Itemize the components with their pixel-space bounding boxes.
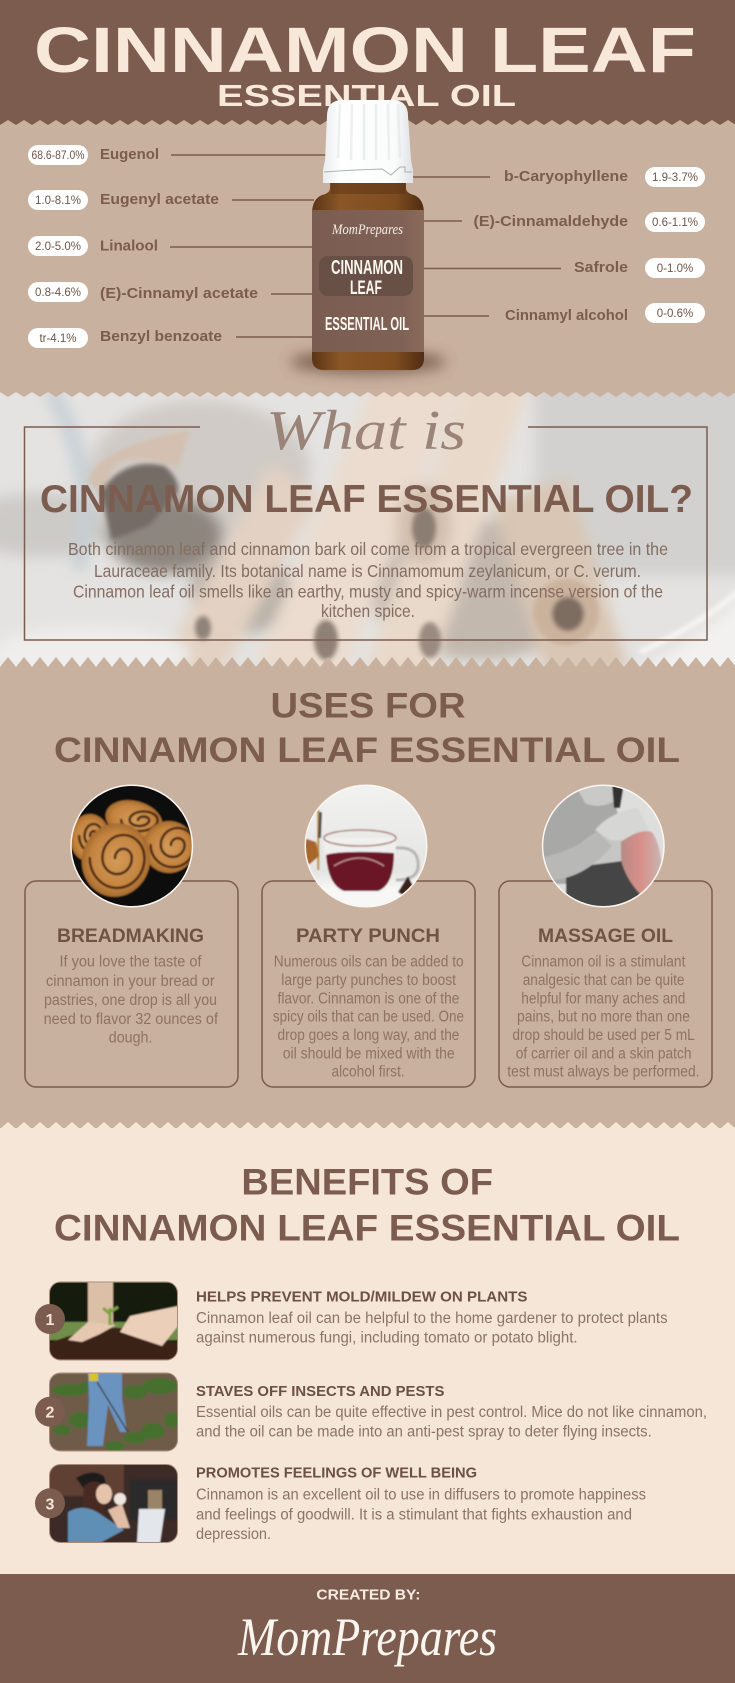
chemical composition: left labels: 2.0-5.0%: [35, 241, 81, 253]
chemical composition: left labels: Benzyl benzoate: [100, 329, 222, 345]
benefit 1: [35, 1282, 668, 1360]
benefit text: and the oil can be made into an anti-pest spray to deter flying insects.: [196, 1424, 652, 1441]
bottle: ESSENTIAL OIL: [325, 314, 409, 334]
chemical composition: right labels: (E)-Cinnamaldehyde: [474, 214, 628, 230]
card text: [44, 954, 219, 1047]
chemical composition: left labels: 0.8-4.6%: [35, 287, 81, 299]
photo: punch glass: [304, 784, 428, 908]
chemical composition: left labels: 1.0-8.1%: [35, 195, 81, 207]
panel: header background: [0, 0, 735, 126]
card text: [507, 954, 700, 1081]
benefit text: [196, 1310, 668, 1347]
heading: uses: USES FOR: [270, 686, 466, 726]
card text: drop should be used per 5 mL: [512, 1027, 695, 1044]
chemical composition: left labels: Eugenol: [100, 147, 159, 163]
chemical composition: right labels: 0-0.6%: [657, 308, 693, 320]
chemical composition: right labels: b-Caryophyllene: [504, 169, 628, 185]
photo: cinnamon rolls: [68, 783, 196, 909]
card text: of carrier oil and a skin patch: [516, 1045, 692, 1062]
title: [34, 14, 696, 113]
card text: spicy oils that can be used. One: [273, 1009, 464, 1026]
card text: analgesic that can be quite: [523, 972, 684, 989]
chemical composition: left labels: Eugenyl acetate: [100, 192, 219, 208]
title: CINNAMON LEAF: [34, 14, 696, 86]
number badge: [35, 1304, 65, 1334]
card text: pains, but no more than one: [517, 1009, 690, 1026]
card text: test must always be performed.: [507, 1064, 700, 1081]
number badge: [35, 1488, 65, 1518]
decorative zigzag to cream: [0, 1122, 735, 1129]
card text: dough.: [109, 1030, 152, 1047]
card title: BREADMAKING: [57, 926, 204, 947]
title: ESSENTIAL OIL: [217, 78, 516, 113]
card text: [273, 954, 464, 1081]
bottle: [290, 100, 446, 374]
chemical composition: left labels: tr-4.1%: [39, 333, 77, 345]
decorative zigzag edges of photo: [0, 392, 735, 667]
card text: oil should be mixed with the: [283, 1045, 455, 1062]
benefit text: [196, 1486, 646, 1543]
card title: PARTY PUNCH: [296, 926, 440, 947]
chemical composition: left labels: [28, 145, 326, 348]
panel: what is frame: [24, 427, 707, 640]
chemical composition: right labels: [410, 167, 705, 324]
heading: what is: What is: [266, 400, 466, 462]
heading: benefits: BENEFITS OF: [241, 1160, 493, 1202]
heading: uses: [54, 686, 680, 770]
benefit text: against numerous fungi, including tomato or potato blight.: [196, 1330, 578, 1347]
panel: benefits background: [0, 1129, 735, 1575]
benefit 3: [35, 1464, 646, 1543]
text block: definition: kitchen spice.: [321, 601, 415, 621]
heading: uses: CINNAMON LEAF ESSENTIAL OIL: [54, 730, 680, 770]
card text: large party punches to boost: [281, 972, 457, 989]
text block: definition: Both cinnamon leaf and cinnamon bark oil come from a tropical evergreen tree in the: [68, 539, 668, 559]
card text: flavor. Cinnamon is one of the: [278, 990, 459, 1007]
number badge: [35, 1397, 65, 1427]
bottle: CINNAMON: [331, 257, 403, 279]
number badge: 3: [46, 1496, 55, 1513]
card text: pastries, one drop is all you: [44, 992, 217, 1009]
card text: helpful for many aches and: [521, 990, 685, 1007]
panel: composition background: [0, 120, 735, 395]
chemical composition: left labels: 68.6-87.0%: [32, 150, 84, 162]
card: massage oil: [499, 784, 712, 1087]
benefit text: Cinnamon leaf oil can be helpful to the home gardener to protect plants: [196, 1310, 668, 1327]
chemical composition: right labels: 0-1.0%: [657, 263, 693, 275]
benefit text: Cinnamon is an excellent oil to use in diffusers to promote happiness: [196, 1486, 646, 1504]
chemical composition: right labels: 1.9-3.7%: [652, 172, 698, 184]
benefit 2: [35, 1373, 707, 1451]
card text: Cinnamon oil is a stimulant: [521, 954, 686, 971]
heading: benefits: CINNAMON LEAF ESSENTIAL OIL: [54, 1206, 680, 1248]
card: party punch: [262, 784, 475, 1087]
benefit heading: HELPS PREVENT MOLD/MILDEW ON PLANTS: [196, 1290, 528, 1306]
card text: drop goes a long way, and the: [278, 1027, 459, 1044]
number badge: 1: [46, 1312, 55, 1329]
number badge: 2: [46, 1405, 55, 1422]
chemical composition: left labels: Linalool: [100, 238, 158, 254]
bottle: LEAF: [350, 278, 382, 299]
benefit heading: STAVES OFF INSECTS AND PESTS: [196, 1384, 445, 1400]
bottle: MomPrepares: [331, 222, 403, 238]
footer label: CREATED BY:: [316, 1587, 420, 1604]
photo: blurred cinnamon sticks background: [0, 392, 735, 667]
photo: woman with coffee and laptop: [49, 1464, 178, 1543]
panel: uses background: [0, 667, 735, 1128]
chemical composition: right labels: Safrole: [574, 260, 628, 276]
card text: cinnamon in your bread or: [46, 973, 215, 990]
card text: If you love the taste of: [60, 954, 202, 971]
chemical composition: right labels: 0.6-1.1%: [652, 217, 698, 229]
chemical composition: left labels: (E)-Cinnamyl acetate: [100, 286, 258, 302]
card text: need to flavor 32 ounces of: [44, 1011, 219, 1028]
card title: MASSAGE OIL: [538, 926, 673, 947]
card text: Numerous oils can be added to: [274, 954, 464, 971]
text block: definition: [68, 539, 668, 621]
footer: [0, 1574, 735, 1683]
text block: definition: Cinnamon leaf oil smells like an earthy, musty and spicy-warm incense version of the: [73, 582, 663, 602]
logo: MomPrepares: MomPrepares: [237, 1607, 497, 1667]
benefit text: [196, 1404, 707, 1441]
card text: alcohol first.: [332, 1064, 405, 1081]
chemical composition: right labels: Cinnamyl alcohol: [505, 308, 628, 324]
photo: planting: [49, 1282, 178, 1360]
card: breadmaking: [25, 783, 238, 1087]
heading: cinnamon leaf essential oil: CINNAMON LEAF ESSENTIAL OIL?: [40, 478, 693, 521]
photo: spraying field: [49, 1373, 180, 1451]
benefit text: Essential oils can be quite effective in pest control. Mice do not like cinnamon,: [196, 1404, 707, 1421]
benefit text: depression.: [196, 1526, 271, 1543]
heading: benefits: [54, 1160, 680, 1248]
benefit text: and feelings of goodwill. It is a stimulant that fights exhaustion and: [196, 1506, 632, 1523]
text block: definition: Lauraceae family. Its botanical name is Cinnamomum zeylanicum, or C. verum.: [94, 561, 641, 581]
photo: massage arm: [541, 784, 667, 912]
benefit heading: PROMOTES FEELINGS OF WELL BEING: [196, 1466, 477, 1482]
